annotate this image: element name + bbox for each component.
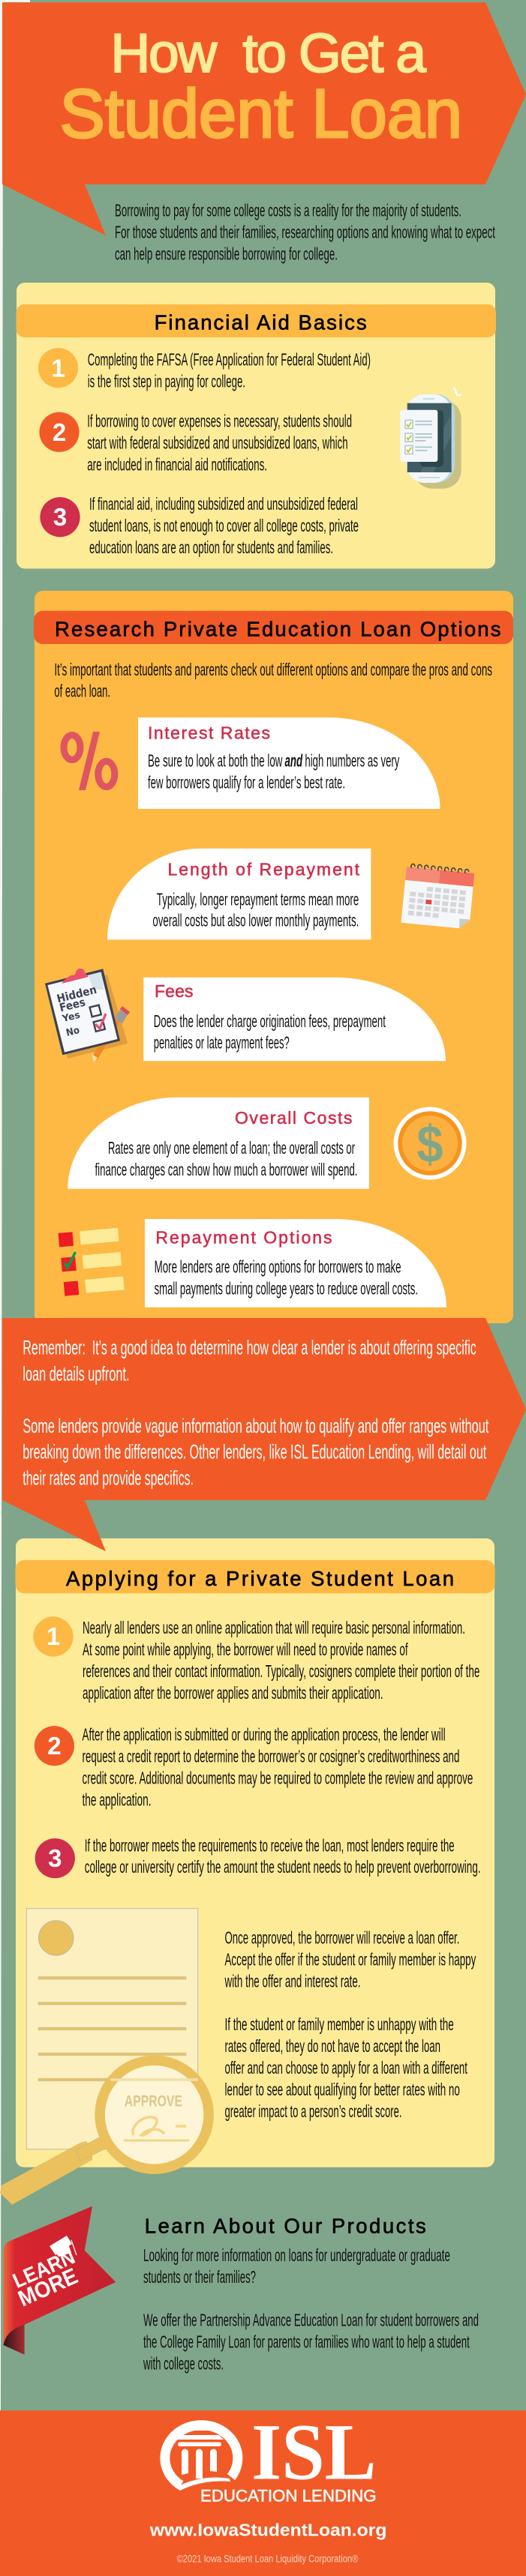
icon: hidden fees clipboard: No [65,1025,81,1039]
heading bar: applying for a private student loan [15,1560,495,1593]
card: interest rates: Be sure to look at both the low [148,751,283,771]
heading bar: applying for a private student loan: Applying for a Private Student Loan [66,1567,454,1590]
learn more ribbon: MORE [14,2263,82,2311]
step 2 text [83,1725,473,1809]
panel: financial aid basics [17,283,496,568]
card: length of repayment: overall costs but also lower monthly payments. [152,910,359,930]
card: interest rates [138,717,440,809]
card: fees: Fees [155,981,194,1001]
card: repayment options [145,1219,446,1307]
step 3 text: education loans are an option for students and families. [89,538,333,557]
text: loan offer: with the offer and interest rate. [224,1972,361,1991]
icon: hidden fees clipboard: Hidden [56,983,98,1005]
footer [0,2409,526,2576]
logo: column emblem [165,2425,238,2491]
heading: learn about our products: Learn About Our Products [145,2214,426,2237]
step 2 number badge: 2 [47,1732,62,1760]
card: length of repayment [107,849,371,939]
website url: www.IowaStudentLoan.org [149,2521,386,2540]
logo: ISL wordmark: ISL [251,2409,377,2497]
step 1 text [83,1618,479,1703]
callout: remember banner: their rates and provide specifics. [23,1467,194,1490]
step 3 number badge: 3 [53,503,67,531]
step 3 text [85,1835,481,1877]
panel: applying for a private student loan [0,1538,495,2205]
icon: repayment checklist [59,1228,125,1296]
icon: percent sign [64,732,115,790]
card: interest rates: high numbers as very [305,751,400,771]
text: learn about our products: with college costs. [143,2354,224,2374]
step 1 number badge [33,1616,74,1657]
text: loan offer [224,1928,476,2121]
heading bar: financial aid basics [17,304,496,337]
icon: hidden fees clipboard: Yes [60,1009,81,1024]
step 2 number badge: 2 [53,418,66,446]
card: length of repayment: Length of Repayment [168,859,360,879]
card: interest rates: few borrowers qualify for a lender’s best rate. [148,773,345,792]
heading bar: research private education loan options: Research Private Education Loan Options [55,617,501,640]
icon: graduation cap [50,2236,77,2257]
title banner [2,2,526,235]
callout: remember banner: loan details upfront. [23,1362,130,1385]
icon: dollar coin: $ [417,1115,443,1173]
step 2 number badge [39,412,80,452]
text: learn about our products: students or their families? [143,2267,256,2287]
icon: calendar [401,864,475,930]
step 1 number badge [38,348,78,388]
learn more ribbon [3,2206,116,2355]
card: overall costs: Overall Costs [235,1108,352,1128]
panel: research private education loan options [34,591,513,1323]
illustration: loan document under magnifier: APPROVE [125,2092,182,2110]
icon: phone with checklist [400,388,461,489]
icon: hidden fees clipboard [45,969,128,1062]
heading bar: research private education loan options [34,611,513,644]
step 3 number badge [40,497,80,537]
step 1 number badge: 1 [51,354,65,382]
title line 1: How to Get a [111,23,426,84]
illustration: loan document under magnifier [0,1909,209,2205]
step 1 text: is the first step in paying for college. [88,371,245,391]
step 1 number badge: 1 [47,1622,60,1650]
intro text: of each loan. [54,681,110,701]
step 2 text: are included in financial aid notifications. [87,454,267,474]
step 2 number badge [35,1726,74,1766]
copyright: ©2021 Iowa Student Loan Liquidity Corporation® [177,2552,359,2564]
intro text [54,660,492,701]
card: interest rates: and [285,751,303,771]
card: overall costs [68,1098,369,1189]
step 3 number badge: 3 [48,1844,62,1872]
step 2 text: the application. [83,1790,152,1809]
card: fees: penalties or late payment fees? [154,1033,290,1053]
title line 2: Student Loan [60,76,462,152]
text: learn about our products [143,2245,479,2374]
step 1 text [88,349,371,391]
icon: dollar coin [393,1107,467,1180]
icon: hidden fees clipboard: Fees [58,995,87,1014]
intro paragraph: can help ensure responsible borrowing for college. [115,244,338,264]
card: interest rates: Interest Rates [148,723,270,743]
heading bar: financial aid basics: Financial Aid Basics [155,310,367,334]
logo: education lending: EDUCATION LENDING [200,2487,377,2506]
step 3 text [89,494,359,557]
callout: remember banner [2,1318,526,1551]
card: repayment options: Repayment Options [155,1228,332,1248]
learn more ribbon: LEARN [9,2245,78,2293]
card: fees [143,978,446,1061]
step 2 text: start with federal subsidized and unsubsidized loans, which [87,433,348,452]
card: length of repayment: Typically, longer repayment terms mean more [157,889,359,909]
step 3 number badge [35,1838,75,1878]
step 2 text [87,411,352,474]
intro paragraph [115,201,495,264]
